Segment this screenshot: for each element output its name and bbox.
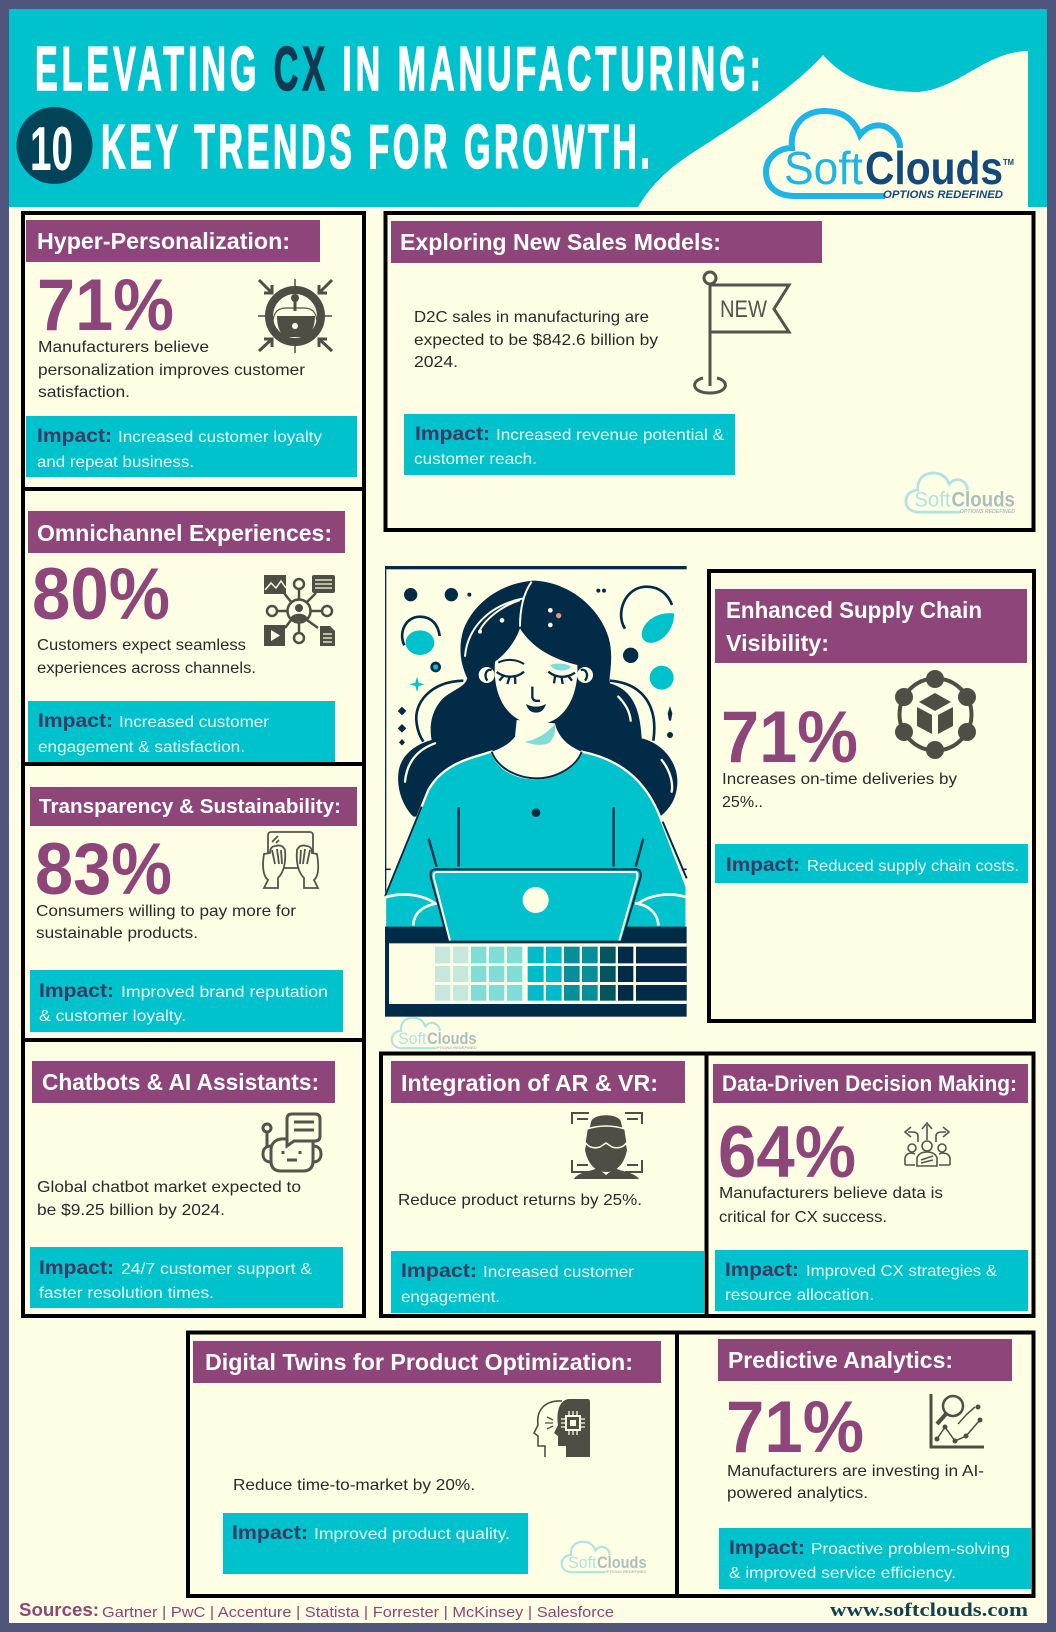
description: Manufacturers believe data is bbox=[719, 1185, 943, 1202]
SoftClouds logo: OPTIONS REDEFINED bbox=[883, 189, 1003, 201]
impact box: Proactive problem-solving bbox=[811, 1541, 1010, 1558]
footer: website: www.softclouds.com bbox=[830, 1600, 1028, 1621]
description bbox=[719, 1185, 943, 1226]
description: Manufacturers are investing in AI- bbox=[727, 1463, 984, 1480]
impact box: Impact: bbox=[729, 1538, 805, 1559]
heading: Integration of AR & VR: bbox=[401, 1070, 658, 1096]
heading: Exploring New Sales Models: bbox=[400, 229, 721, 255]
impact box: Impact: bbox=[415, 424, 490, 445]
impact box: Reduced supply chain costs. bbox=[807, 858, 1019, 875]
title line 2: KEY TRENDS FOR GROWTH. bbox=[101, 112, 650, 182]
impact box: Impact: bbox=[39, 981, 114, 1002]
heading bbox=[28, 511, 345, 553]
panel: data-driven decision making bbox=[706, 1054, 1034, 1316]
face bbox=[479, 628, 593, 725]
description: expected to be $842.6 billion by bbox=[414, 332, 658, 349]
heading bbox=[30, 787, 357, 826]
statistic: 83% bbox=[35, 829, 172, 910]
heading: Data-Driven Decision Making: bbox=[722, 1071, 1017, 1096]
impact box: Impact: bbox=[37, 426, 112, 447]
panel: transparency and sustainability bbox=[23, 764, 364, 1040]
impact box: Improved product quality. bbox=[314, 1526, 510, 1543]
description: experiences across channels. bbox=[37, 660, 256, 677]
impact box bbox=[391, 1251, 704, 1313]
impact box: Increased revenue potential & bbox=[496, 427, 724, 444]
decorative shapes bbox=[398, 587, 674, 746]
SoftClouds logo: Soft bbox=[784, 142, 863, 194]
description bbox=[722, 771, 957, 811]
impact box: and repeat business. bbox=[37, 454, 194, 471]
icon: robot chat bbox=[263, 1114, 321, 1171]
number badge bbox=[16, 107, 92, 184]
description: 25%.. bbox=[722, 794, 763, 811]
panel: hyper-personalization bbox=[23, 213, 364, 489]
description bbox=[36, 903, 297, 942]
icon: decision making bbox=[905, 1123, 950, 1166]
heading: Transparency & Sustainability: bbox=[39, 796, 341, 818]
impact box: engagement. bbox=[401, 1289, 500, 1306]
panel: integration of AR and VR bbox=[381, 1054, 706, 1316]
icon: analytics chart bbox=[931, 1394, 984, 1447]
SoftClouds logo: TM bbox=[1003, 158, 1014, 167]
icon: hands on tablet bbox=[263, 832, 318, 888]
description: Customers expect seamless bbox=[37, 637, 246, 654]
impact box: engagement & satisfaction. bbox=[38, 739, 245, 756]
watermark logo under illustration bbox=[392, 1018, 477, 1050]
impact box bbox=[26, 416, 357, 477]
heading: Enhanced Supply Chain bbox=[726, 597, 982, 623]
watermark logo: Soft bbox=[568, 1554, 597, 1572]
heading: Predictive Analytics: bbox=[728, 1347, 953, 1373]
description: Global chatbot market expected to bbox=[37, 1179, 301, 1196]
heading bbox=[193, 1341, 661, 1383]
title line 1: ELEVATING CX IN MANUFACTURING: bbox=[35, 34, 761, 104]
impact box: Impact: bbox=[38, 711, 113, 732]
watermark logo: OPTIONS REDEFINED bbox=[604, 1569, 647, 1574]
keyboard bbox=[389, 943, 687, 1004]
description: sustainable products. bbox=[36, 925, 198, 942]
heading bbox=[26, 220, 320, 262]
heading bbox=[391, 1061, 685, 1103]
description: be $9.25 billion by 2024. bbox=[37, 1202, 225, 1219]
impact box bbox=[719, 1528, 1031, 1589]
footer: sources bbox=[19, 1600, 614, 1621]
panel: enhanced supply chain visibility bbox=[709, 571, 1034, 1021]
description: Reduce product returns by 25%. bbox=[398, 1192, 642, 1209]
watermark logo: Soft bbox=[914, 489, 951, 512]
impact box: Increased customer bbox=[119, 714, 270, 731]
impact box: customer reach. bbox=[414, 451, 537, 468]
description bbox=[414, 309, 658, 371]
sweater bbox=[385, 752, 687, 928]
icon: new flag: NEW bbox=[720, 296, 767, 323]
impact box: & improved service efficiency. bbox=[729, 1565, 956, 1582]
description: Increases on-time deliveries by bbox=[722, 771, 957, 788]
watermark logo under illustration: OPTIONS REDEFINED bbox=[434, 1045, 477, 1050]
neck bbox=[492, 720, 582, 778]
heading: Digital Twins for Product Optimization: bbox=[205, 1349, 633, 1375]
panel: predictive analytics bbox=[677, 1332, 1034, 1596]
statistic: 71% bbox=[721, 697, 858, 778]
watermark logo: OPTIONS REDEFINED bbox=[960, 509, 1015, 515]
heading bbox=[391, 221, 822, 263]
description bbox=[37, 1179, 301, 1219]
illustration: woman with laptop bbox=[385, 566, 687, 1017]
impact box bbox=[28, 701, 335, 762]
impact box: Impact: bbox=[725, 1260, 799, 1281]
impact box bbox=[30, 1247, 343, 1308]
laptop bbox=[431, 869, 641, 942]
impact box: Impact: bbox=[401, 1261, 477, 1282]
icon: digital twin heads bbox=[534, 1399, 590, 1457]
impact box: & customer loyalty. bbox=[39, 1008, 186, 1025]
SoftClouds logo: Clouds bbox=[865, 142, 1003, 194]
description: satisfaction. bbox=[38, 384, 130, 401]
impact box bbox=[404, 414, 735, 475]
heading bbox=[32, 1061, 335, 1103]
heading bbox=[718, 1339, 1012, 1381]
impact box bbox=[715, 1250, 1028, 1311]
description: Consumers willing to pay more for bbox=[36, 903, 297, 920]
watermark logo under illustration: Soft bbox=[398, 1030, 427, 1048]
impact box: Impact: bbox=[726, 855, 800, 876]
description: D2C sales in manufacturing are bbox=[414, 309, 649, 326]
description bbox=[37, 637, 256, 677]
icon: connected channels bbox=[264, 575, 335, 646]
icon: supply chain network bbox=[895, 670, 976, 759]
impact box: Impact: bbox=[39, 1258, 114, 1279]
SoftClouds logo bbox=[766, 111, 1014, 201]
impact box: Increased customer loyalty bbox=[118, 429, 322, 446]
impact box: Improved CX strategies & bbox=[806, 1263, 997, 1280]
watermark logo: Clouds bbox=[597, 1554, 647, 1572]
impact box: Improved brand reputation bbox=[121, 984, 328, 1001]
panel: exploring new sales models bbox=[386, 213, 1034, 530]
heading: Visibility: bbox=[726, 630, 829, 656]
description: Manufacturers believe bbox=[38, 339, 209, 356]
impact box: 24/7 customer support & bbox=[121, 1261, 312, 1278]
impact box: Impact: bbox=[232, 1523, 308, 1544]
impact box: resource allocation. bbox=[725, 1287, 874, 1304]
footer: sources: Gartner | PwC | Accenture | Statista | Forrester | McKinsey | Salesforce bbox=[102, 1604, 614, 1621]
icon: VR headset user bbox=[572, 1113, 642, 1179]
impact box bbox=[223, 1513, 528, 1574]
footer: sources: Sources: bbox=[19, 1600, 99, 1620]
impact box bbox=[30, 970, 343, 1032]
impact box: faster resolution times. bbox=[39, 1285, 214, 1302]
statistic: 71% bbox=[37, 265, 174, 346]
heading bbox=[713, 1064, 1028, 1103]
heading: Omnichannel Experiences: bbox=[37, 520, 332, 546]
watermark logo bbox=[562, 1542, 647, 1574]
description: powered analytics. bbox=[727, 1485, 868, 1502]
panel: chatbots and AI assistants bbox=[23, 1040, 364, 1316]
description: Reduce time-to-market by 20%. bbox=[233, 1477, 475, 1494]
description bbox=[727, 1463, 984, 1502]
impact box bbox=[715, 844, 1028, 883]
panel: omnichannel experiences bbox=[23, 489, 364, 764]
hair bbox=[398, 581, 677, 817]
heading: Chatbots & AI Assistants: bbox=[42, 1069, 319, 1095]
watermark logo bbox=[906, 473, 1015, 515]
statistic: 71% bbox=[726, 1387, 864, 1468]
description: personalization improves customer bbox=[38, 362, 306, 379]
table bbox=[385, 927, 687, 1017]
icon: customer focus bbox=[258, 279, 332, 353]
icon: new flag bbox=[695, 272, 789, 393]
statistic: 64% bbox=[718, 1112, 856, 1193]
watermark logo: Clouds bbox=[951, 489, 1015, 512]
heading: Hyper-Personalization: bbox=[37, 228, 290, 254]
description bbox=[38, 339, 306, 401]
number badge: 10 bbox=[30, 115, 73, 184]
statistic: 80% bbox=[32, 554, 170, 635]
watermark logo under illustration: Clouds bbox=[427, 1030, 477, 1048]
impact box: Increased customer bbox=[483, 1264, 635, 1281]
heading bbox=[715, 589, 1027, 663]
header banner bbox=[9, 9, 1047, 207]
description: 2024. bbox=[414, 354, 458, 371]
description: critical for CX success. bbox=[719, 1209, 887, 1226]
panel: digital twins bbox=[188, 1332, 677, 1596]
